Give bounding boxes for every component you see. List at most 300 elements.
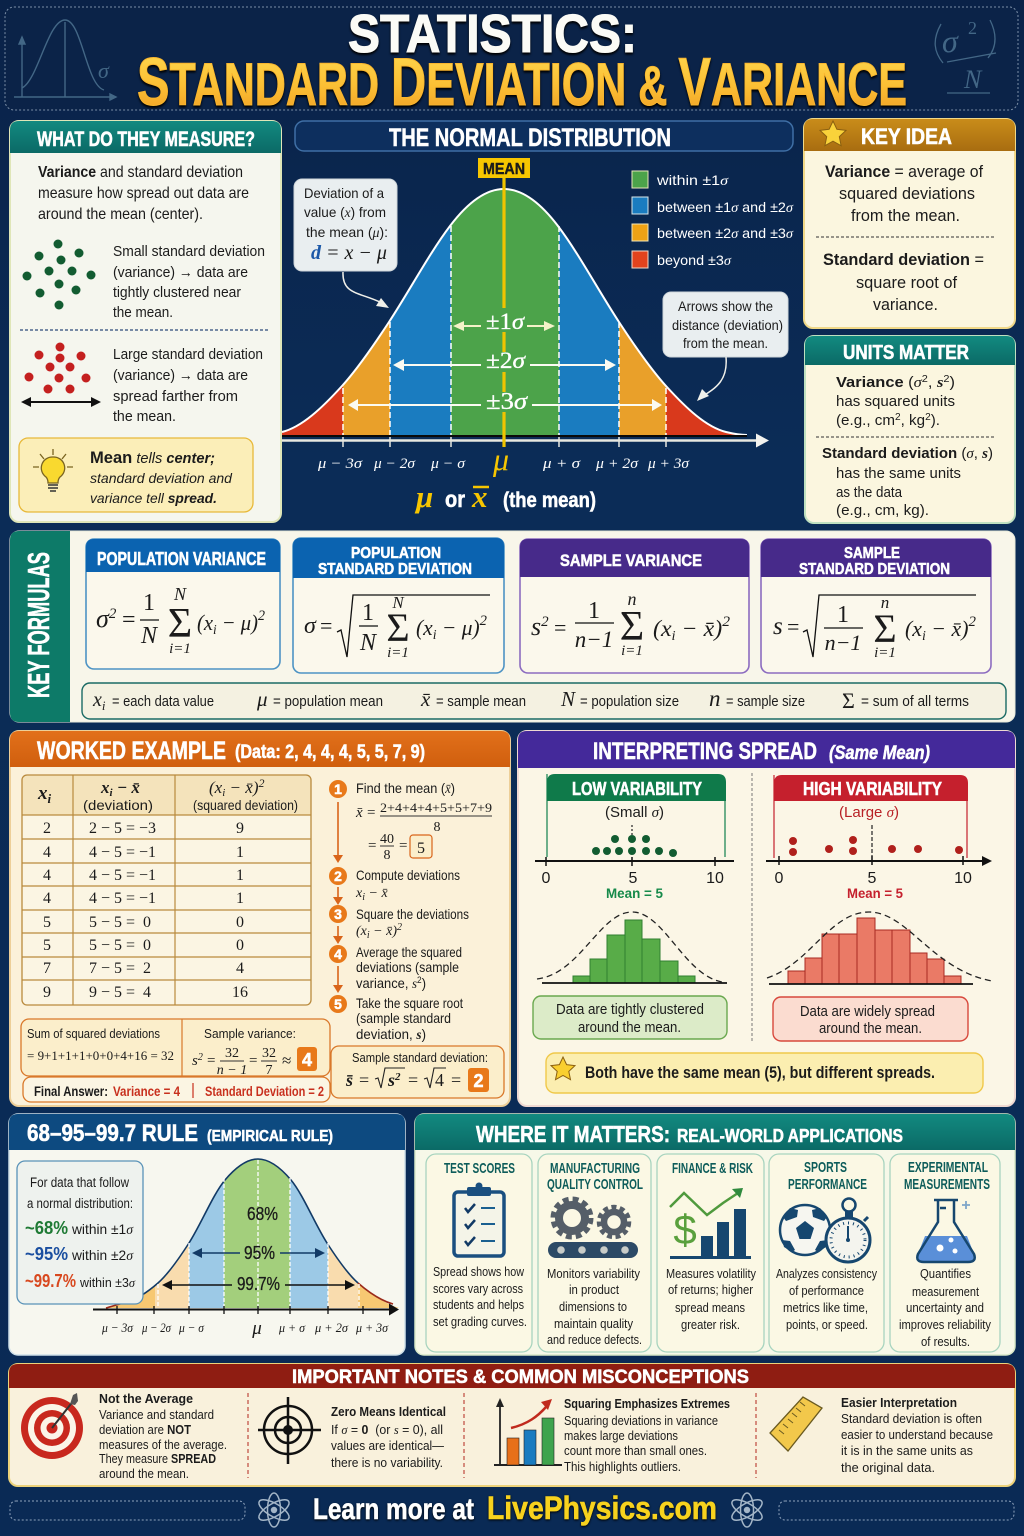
high variability header [774, 775, 968, 858]
formula card: sample variance: = [554, 615, 566, 640]
final answer [23, 1077, 330, 1102]
variance units: , kg [901, 412, 925, 429]
sum and variance box: = 9+1+1+1+0+0+4+16 = 32 [27, 1048, 174, 1063]
table: 9 [236, 820, 244, 837]
card: finance and risk: Measures volatility [666, 1266, 756, 1281]
symbol legend: x̄ [420, 687, 431, 711]
variance units: Variance (σ [836, 374, 921, 391]
symbol legend: x [93, 689, 102, 711]
card: experimental measurements: EXPERIMENTAL [908, 1159, 988, 1176]
step 4: 2 [417, 975, 422, 985]
note: zero means identical: there is no variability. [331, 1455, 443, 1470]
symbol legend: = sample mean [436, 693, 526, 710]
heading: KEY FORMULAS [21, 552, 56, 698]
arrows: sigma ranges: ±3σ [486, 389, 528, 415]
table: 4 − 5 = −1 [89, 844, 156, 861]
high variability header: HIGH VARIABILITY [803, 779, 942, 799]
step 4: ) [422, 975, 426, 991]
icon: variance formula sketch: N [963, 65, 983, 94]
step 2: Compute deviations [356, 867, 460, 883]
arrow: callout to tail [697, 357, 726, 401]
symbol legend: = population size [580, 693, 679, 710]
heading: REAL-WORLD APPLICATIONS [677, 1126, 903, 1146]
icon: bell curve sketch: σ [98, 58, 110, 83]
icon: target [21, 1393, 83, 1459]
sum and variance box: s [192, 1053, 198, 1069]
step 1: = [367, 805, 375, 821]
callout: arrows explained: from the mean. [683, 335, 768, 351]
table: (x [209, 778, 222, 797]
table: 5 − 5 = 0 [89, 937, 151, 954]
note: squaring emphasizes extremes [564, 1396, 730, 1474]
caption [773, 997, 968, 1041]
formula card: population standard deviation: i=1 [387, 645, 409, 661]
card: manufacturing quality control: MANUFACTURING [550, 1160, 640, 1177]
heading: WORKED EXAMPLE [37, 737, 226, 765]
intro text [38, 164, 249, 223]
step 5: Take the square root [356, 995, 463, 1011]
callout: mean tells center: Mean tells center; [90, 448, 215, 467]
card: experimental measurements: measurement [912, 1284, 979, 1299]
final answer: Standard Deviation = 2 [205, 1083, 324, 1099]
callout: mean tells center: standard deviation and [90, 470, 233, 486]
sample standard deviation box: 4 [435, 1070, 444, 1090]
dot plot: Mean = 5 [847, 885, 903, 901]
icon: tight dot cluster [22, 240, 96, 310]
step 3: 3 [334, 906, 342, 922]
table [22, 775, 311, 1005]
table: 5 [43, 937, 51, 954]
card: manufacturing quality control: QUALITY CONTROL [547, 1176, 643, 1193]
standard deviation units: (e.g., cm, kg). [836, 502, 929, 519]
note: squaring emphasizes extremes: This highlights outliers. [564, 1459, 681, 1474]
table: − [113, 778, 131, 797]
formula card: population variance: N [140, 623, 159, 649]
card: test scores: set grading curves. [433, 1314, 527, 1329]
note: easier interpretation: it is in the same units as [841, 1443, 973, 1458]
variance units: 2 [895, 412, 901, 423]
footer [10, 1490, 1014, 1527]
icon: light bulb [33, 449, 73, 491]
note: squaring emphasizes extremes: makes large deviations [564, 1428, 678, 1443]
formula card: sample standard deviation [761, 539, 991, 673]
table: 5 [43, 914, 51, 931]
card: sports performance: of performance [789, 1283, 864, 1298]
step 5: 5 [334, 996, 342, 1012]
table: 2 [258, 776, 264, 790]
panel: the normal distribution [280, 121, 794, 514]
table: 5 − 5 = 0 [89, 914, 151, 931]
chart: empirical rule curve: 95% [244, 1243, 275, 1263]
panel: units matter [805, 336, 1015, 523]
legend: within ±1 σ [656, 172, 729, 189]
card: sports performance: metrics like time, [783, 1300, 868, 1315]
standard deviation units: Standard deviation (σ, s) [822, 445, 993, 462]
heading: WHERE IT MATTERS: [476, 1121, 670, 1147]
variance definition: squared deviations [839, 184, 975, 203]
table: 4 [236, 960, 244, 977]
formula card: sample variance: i [672, 629, 676, 644]
rule summary box: within ±3σ [79, 1275, 136, 1290]
formula card: population standard deviation: μ) [462, 615, 480, 640]
icon: variance formula sketch: σ [942, 23, 959, 59]
formula card: population variance: μ) [241, 610, 258, 635]
table: (deviation) [83, 797, 153, 813]
variance units: ). [931, 412, 940, 429]
card: sports performance: PERFORMANCE [788, 1176, 867, 1193]
variance units: s [936, 375, 944, 391]
note: easier interpretation: Standard deviation is often [841, 1411, 982, 1426]
note: squaring emphasizes extremes: count more than small ones. [564, 1443, 707, 1458]
table: 4 − 5 = −1 [89, 867, 156, 884]
chart: empirical rule curve: μ + σ [278, 1320, 306, 1335]
table: (squared deviation) [193, 797, 298, 813]
table: 2 [43, 820, 51, 837]
formula card: population variance: i=1 [169, 641, 191, 657]
table: i [110, 787, 114, 799]
sample standard deviation box: 2 [473, 1071, 484, 1091]
step 3: 2 [397, 922, 402, 933]
caption: around the mean. [819, 1020, 922, 1037]
standard deviation definition: variance. [873, 295, 938, 314]
formula card: population standard deviation: N [359, 630, 378, 656]
formula card: sample variance: 2 [541, 614, 549, 630]
step 1: 8 [384, 848, 390, 863]
sum and variance box: 7 [266, 1063, 272, 1078]
icon: ruler [770, 1397, 822, 1451]
step 4: deviations (sample [356, 959, 459, 975]
callout: deviation definition: the mean (μ): [306, 224, 388, 241]
table: 4 [43, 867, 51, 884]
formula card: sample standard deviation: = [787, 614, 799, 639]
chart: empirical rule curve: 99.7% [237, 1274, 280, 1294]
step 1: 8 [434, 820, 440, 835]
formula card: population standard deviation: 2 [480, 613, 487, 629]
step 1: 40 [380, 832, 394, 847]
sample standard deviation box: s̄ [345, 1070, 353, 1090]
panel: worked example [10, 731, 510, 1106]
large sd text: Large standard deviation [113, 346, 263, 363]
icon: finance chart [670, 1188, 751, 1258]
formula card: population variance: POPULATION VARIANCE [97, 549, 266, 569]
icon: flask [917, 1200, 975, 1262]
note: easier interpretation [841, 1395, 993, 1475]
rule summary box: within ±1σ [71, 1221, 134, 1238]
dot plot: Mean = 5 [606, 885, 663, 901]
callout: same mean different spreads [546, 1053, 983, 1093]
formula card: sample standard deviation: s [773, 613, 783, 640]
step 5: (sample standard [356, 1010, 451, 1026]
table: i [48, 791, 52, 806]
chart: empirical rule curve: μ + 2σ [314, 1320, 349, 1335]
formula card: sample standard deviation: STANDARD DEVIATION [799, 561, 950, 578]
axis labels: μ − 2σ [373, 456, 416, 472]
formula card: population standard deviation: 1 [362, 600, 374, 626]
formula card: population standard deviation: STANDARD DEVIATION [318, 561, 472, 578]
step 4: Average the squared [356, 944, 462, 960]
formula card: population standard deviation: N [391, 593, 405, 612]
formula card: sample variance: s [531, 612, 541, 641]
dot plot [535, 825, 734, 901]
icon: crosshair [258, 1397, 321, 1464]
caption [533, 996, 727, 1039]
arrow: callout to curve [343, 272, 389, 308]
chart: empirical rule curve: μ − 3σ [101, 1320, 134, 1335]
formula card: sample standard deviation: x̄) [952, 616, 969, 641]
note: zero means identical: Zero Means Identical [331, 1404, 446, 1419]
card: test scores [426, 1154, 532, 1352]
rule summary box: ~99.7% [25, 1271, 76, 1291]
step 3: − [370, 924, 386, 939]
step 4: 4 [334, 946, 342, 962]
chart: empirical rule curve: 68% [247, 1204, 278, 1224]
card: sports performance: Analyzes consistency [776, 1266, 877, 1281]
step 4 [329, 944, 462, 992]
table: − [225, 778, 245, 797]
low variability header: LOW VARIABILITY [572, 779, 702, 799]
large sd text: (variance) → data are [113, 367, 248, 384]
heading: WHAT DO THEY MEASURE? [37, 128, 255, 151]
mean symbols caption: x [471, 479, 488, 514]
legend: between ±2σ and ±3σ [657, 225, 794, 242]
step 3: i [367, 930, 370, 941]
table: i [222, 787, 225, 799]
rule summary box: within ±2σ [71, 1247, 134, 1264]
variance units [836, 374, 955, 429]
sample standard deviation box: = [451, 1070, 461, 1090]
card: experimental measurements: uncertainty and [906, 1300, 984, 1315]
dot plot: 0 [542, 870, 551, 887]
heading: UNITS MATTER [843, 342, 969, 364]
step 2: 2 [334, 868, 342, 884]
heading: INTERPRETING SPREAD [593, 738, 817, 765]
step 3 [329, 905, 469, 941]
variance units: 2 [925, 412, 931, 423]
panel: what do they measure [10, 121, 281, 522]
title: STANDARD DEVIATION & VARIANCE [137, 44, 907, 120]
icon: growth bars [494, 1398, 562, 1465]
heading bar [295, 121, 793, 152]
step 3: Square the deviations [356, 906, 469, 922]
formula card: sample standard deviation: Σ [873, 606, 897, 651]
dot plot [766, 825, 992, 901]
card: experimental measurements: Quantifies [920, 1266, 971, 1281]
step 3: x̄) [386, 924, 397, 939]
formula card: population variance: N [173, 584, 187, 604]
symbol legend: N [560, 687, 576, 711]
callout: deviation definition [294, 179, 397, 271]
callout: deviation definition: d = x − μ [311, 242, 387, 264]
formula card: sample variance: 2 [722, 614, 731, 630]
callout: mean tells center: variance tell spread. [90, 490, 217, 506]
intro text: around the mean (center). [38, 206, 203, 223]
small sd text: Small standard deviation [113, 243, 265, 260]
histogram [537, 912, 727, 983]
step 1: 2+4+4+4+5+5+7+9 [380, 800, 492, 815]
table: 7 − 5 = 2 [89, 960, 151, 977]
step 2: x [356, 886, 362, 901]
table: 4 [43, 844, 51, 861]
heading: KEY IDEA [861, 124, 952, 149]
step 5: deviation, s) [356, 1026, 426, 1043]
step 1: 1 [334, 781, 342, 797]
variance units: ) [950, 374, 955, 391]
sum and variance box: = [249, 1053, 257, 1069]
symbol legend: Σ [842, 688, 855, 713]
table: x̄) [245, 778, 258, 797]
dot plot: 0 [775, 870, 784, 887]
table: x [101, 778, 110, 797]
footer text [313, 1490, 717, 1526]
chart: empirical rule curve [93, 1155, 403, 1339]
formula card: population standard deviation [293, 538, 504, 673]
step 5 [329, 995, 463, 1043]
standard deviation units [822, 445, 993, 519]
callout: deviation definition: value (x) from [304, 204, 386, 221]
standard deviation definition [823, 250, 984, 314]
formula card: population standard deviation: i [433, 628, 437, 643]
symbol legend: i [102, 698, 106, 713]
panel: where it matters [415, 1114, 1015, 1355]
step 2: − [365, 886, 381, 901]
note: not the average: deviation are NOT [99, 1422, 191, 1437]
dot plot: 10 [706, 870, 724, 887]
step flow [329, 780, 492, 1043]
panel: 68-95-99.7 rule [9, 1114, 405, 1355]
chart: bell curve [280, 178, 769, 448]
heading [37, 737, 425, 765]
low variability column [533, 774, 734, 1039]
step 1 [329, 780, 492, 863]
card: sports performance: points, or speed. [786, 1317, 868, 1332]
step 1: Find the mean (x̄) [356, 780, 455, 797]
formula card: sample variance: − [676, 616, 704, 641]
symbol legend: = sum of all terms [861, 693, 969, 710]
high variability column [766, 775, 992, 1041]
card: finance and risk: of returns; higher [668, 1282, 754, 1297]
table: 2 − 5 = −3 [89, 820, 156, 837]
card: finance and risk [657, 1154, 764, 1352]
standard deviation definition: Standard deviation = [823, 250, 984, 269]
icon: variance formula sketch: 2 [968, 18, 977, 38]
card: sports performance: SPORTS [804, 1159, 847, 1176]
footer text: Learn more at [313, 1493, 474, 1526]
formula card: sample standard deviation: (x [905, 616, 922, 641]
legend: between ±1σ and ±2σ [657, 199, 794, 216]
variance definition: from the mean. [851, 206, 960, 225]
formula card: sample variance: n [628, 589, 636, 609]
card: test scores: students and helps [433, 1297, 524, 1312]
heading bar: THE NORMAL DISTRIBUTION [389, 124, 671, 152]
heading [476, 1121, 903, 1147]
mean symbols caption: (the mean) [503, 489, 596, 512]
callout: mean tells center [19, 438, 253, 512]
formula card: sample variance: (x [653, 616, 671, 641]
note: easier interpretation: Easier Interpretation [841, 1395, 957, 1410]
mean label: MEAN [483, 161, 525, 178]
step 1: x̄ [355, 805, 363, 821]
card: experimental measurements: improves reliability [899, 1317, 991, 1332]
card: finance and risk: greater risk. [681, 1317, 740, 1332]
arrows: sigma ranges [348, 309, 662, 415]
large sd text: spread farther from [113, 388, 238, 405]
dot plot: 5 [629, 870, 638, 887]
heading: 68–95–99.7 RULE [27, 1120, 198, 1147]
step 2: x̄ [381, 886, 388, 901]
chart: empirical rule curve: μ − 2σ [141, 1320, 171, 1335]
formula card: sample standard deviation: SAMPLE [844, 545, 900, 562]
variance definition [825, 162, 983, 225]
sum and variance box: Sum of squared deviations [27, 1026, 160, 1041]
header banner [5, 4, 1018, 120]
axis labels: μ − σ [430, 456, 466, 472]
note: squaring emphasizes extremes: Squaring Emphasizes Extremes [564, 1396, 730, 1411]
arrows: sigma ranges: ±1σ [486, 309, 526, 334]
sample standard deviation box: Sample standard deviation: [352, 1050, 488, 1065]
heading: IMPORTANT NOTES & COMMON MISCONCEPTIONS [292, 1367, 749, 1388]
sum and variance box: Sample variance: [204, 1026, 296, 1041]
step 1: 5 [417, 840, 425, 857]
formula card: sample standard deviation: − [926, 616, 952, 641]
rule summary box [17, 1161, 143, 1304]
small sd text: (variance) → data are [113, 264, 248, 281]
card: experimental measurements: of results. [921, 1334, 970, 1349]
icon: atom left [256, 1493, 292, 1527]
chart: empirical rule curve: μ + 3σ [355, 1320, 389, 1335]
axis labels [317, 441, 690, 477]
card: manufacturing quality control [538, 1154, 651, 1352]
axis labels: μ [492, 441, 509, 477]
note: not the average [99, 1391, 227, 1481]
step 3: (x [356, 924, 367, 939]
chart: empirical rule curve: μ [251, 1318, 262, 1339]
card: manufacturing quality control: maintain quality [554, 1316, 633, 1331]
variance units: (e.g., cm [836, 412, 894, 429]
sum and variance box: 2 [198, 1052, 203, 1063]
sum and variance box: n − 1 [217, 1063, 247, 1078]
arrows: sigma ranges: ±2σ [486, 348, 527, 373]
small sd text [113, 243, 265, 321]
formula card: sample variance: 1 [588, 598, 600, 624]
formula card: population variance: 2 [258, 608, 265, 624]
formula card: population variance: σ [96, 604, 109, 633]
formula card: population variance: = [122, 607, 136, 633]
step 2 [329, 867, 460, 903]
heading: (EMPIRICAL RULE) [207, 1128, 333, 1145]
formula card: population variance: i [213, 623, 217, 638]
table: 1 [236, 890, 244, 907]
icon: atom right [729, 1493, 765, 1527]
title: STATISTICS: [348, 4, 637, 64]
card: finance and risk: spread means [675, 1300, 745, 1315]
sum and variance box: 32 [225, 1046, 239, 1061]
symbol legend: n [709, 686, 720, 711]
large sd text [113, 346, 263, 425]
card: manufacturing quality control: Monitors variability [547, 1266, 640, 1281]
intro text: Variance and standard deviation [38, 164, 243, 181]
standard deviation units: as the data [836, 484, 903, 501]
formula card: population variance: 1 [143, 590, 155, 616]
symbol legend: = each data value [112, 693, 214, 710]
dot plot: 5 [868, 870, 877, 887]
legend: beyond ±3σ [657, 252, 732, 269]
symbol legend: = population mean [273, 693, 383, 710]
intro text: measure how spread out data are [38, 185, 249, 202]
formula card: sample variance: x̄) [704, 616, 722, 641]
formula card: sample variance: Σ [620, 604, 644, 650]
note: easier interpretation: easier to understand because [841, 1427, 993, 1442]
heading [27, 1120, 333, 1147]
